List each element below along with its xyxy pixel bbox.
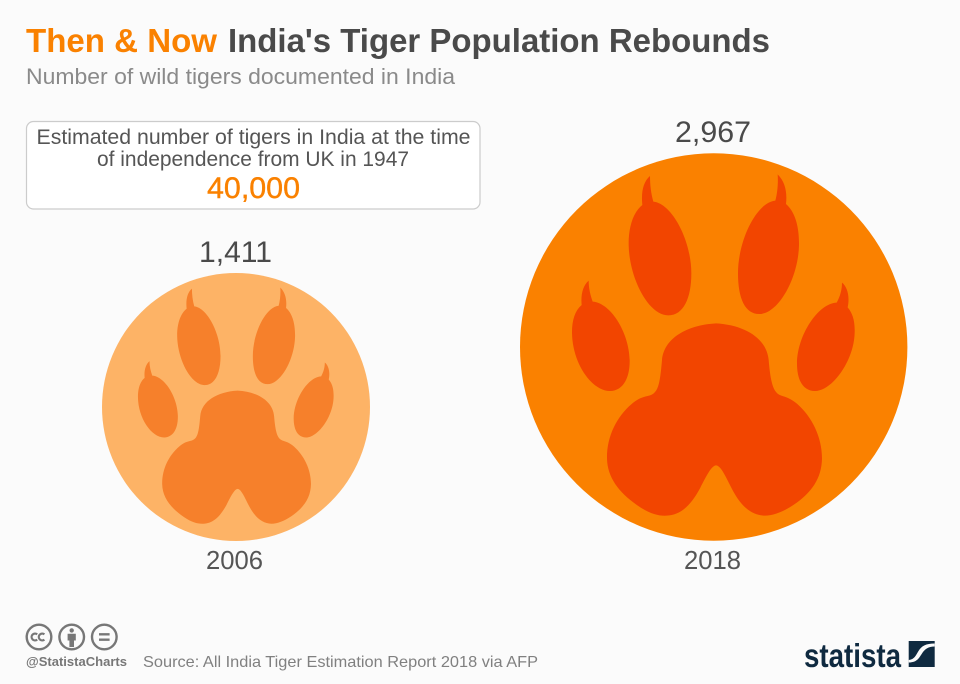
paw circle 2018 — [520, 153, 907, 541]
icon: statista logo — [909, 641, 935, 667]
value label 2018: 2,967 — [675, 116, 751, 149]
year label 2018: 2018 — [684, 545, 741, 575]
callout: 1947 estimate — [26, 122, 480, 209]
title: India's Tiger Population Rebounds — [228, 22, 770, 59]
callout: 1947 estimate: 40,000 — [207, 172, 300, 205]
year label 2006: 2006 — [206, 545, 263, 575]
handle: @StatistaCharts — [26, 655, 127, 669]
value label 2006: 1,411 — [199, 236, 272, 269]
source: Source: All India Tiger Estimation Report 2018 via AFP — [143, 654, 538, 671]
title: Then & Now — [26, 22, 217, 59]
statista wordmark: statista — [804, 637, 902, 674]
icon: creative commons licence — [27, 625, 117, 649]
callout: 1947 estimate: of independence from UK in 1947 — [97, 147, 409, 171]
callout: 1947 estimate: Estimated number of tigers in India at the time — [36, 125, 470, 149]
paw circle 2006 — [102, 273, 370, 541]
subtitle: Number of wild tigers documented in India — [26, 64, 455, 89]
